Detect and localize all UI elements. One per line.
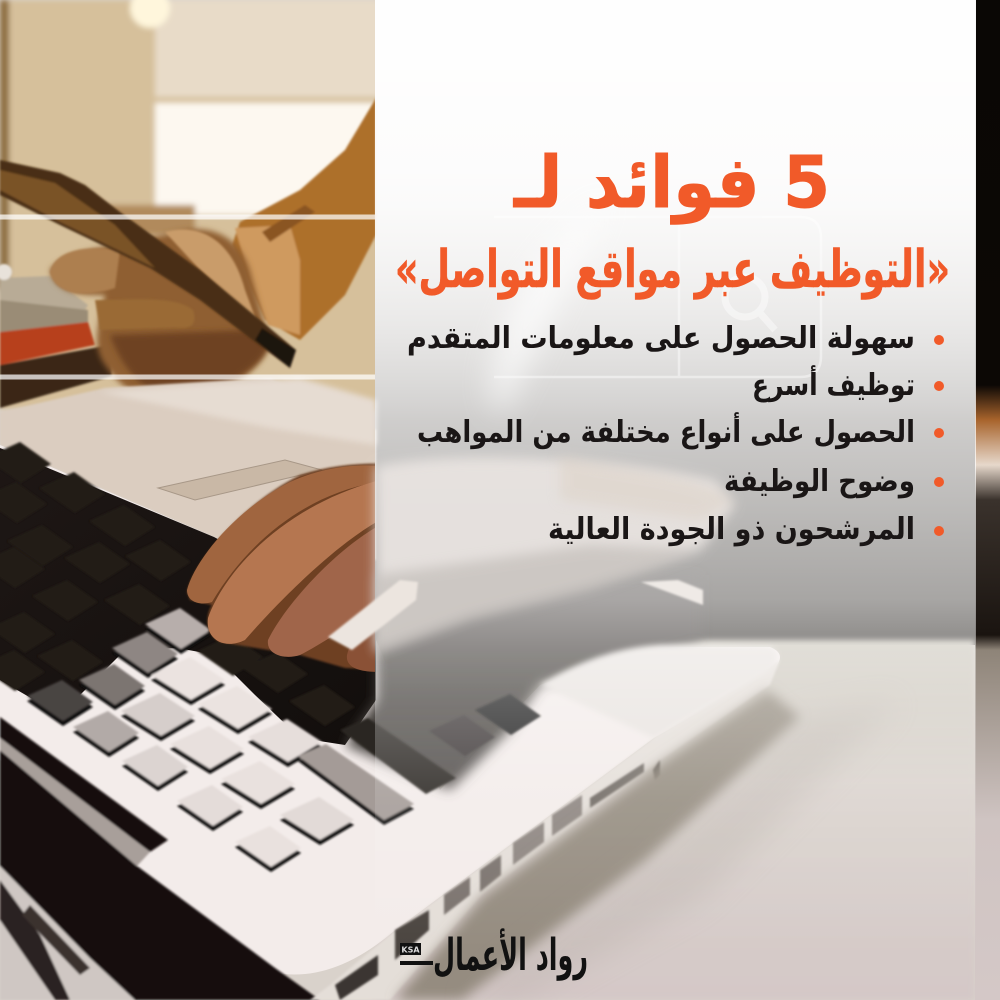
phone: [0, 160, 296, 368]
soft laptop shadow on desk: [395, 690, 800, 1000]
item 3: الحصول على أنواع مختلفة من المواهب: [417, 412, 915, 450]
item 1: سهولة الحصول على معلومات المتقدم: [407, 321, 915, 356]
search box graphic: [494, 217, 821, 377]
dark keyboard well: [0, 448, 376, 745]
laptop ports: [335, 760, 660, 1000]
logo: [400, 928, 588, 981]
light keys: [27, 608, 414, 872]
well seen through panel: [345, 575, 700, 790]
title: [395, 141, 950, 300]
gray keys under panel: [340, 694, 541, 794]
trackpad: [540, 645, 777, 738]
dark keys: [0, 442, 355, 726]
orange sweater sleeve: [232, 98, 376, 340]
item 5: المرشحون ذو الجودة العالية: [548, 512, 915, 547]
benefits list: [407, 321, 944, 547]
shadow fade on desk: [462, 700, 900, 1000]
soft white shape behind search: [490, 195, 610, 420]
laptop palm and trackpad top: [0, 378, 376, 560]
desk surface: [375, 640, 975, 1000]
laptop base: [0, 445, 780, 975]
hand holding phone: [50, 229, 270, 407]
hand through the panel: [376, 455, 735, 655]
logo: رواد الأعمال: [433, 928, 588, 981]
translucent white panel: [375, 0, 976, 1000]
title line 1: 5 فوائد لـ: [513, 141, 830, 224]
horizontal light lines: [0, 217, 375, 377]
logo: KSA: [401, 946, 420, 954]
item 2: توظيف أسرع: [752, 365, 915, 403]
dark room behind laptop: [375, 0, 975, 645]
notebook at left: [0, 264, 112, 408]
blurred wall and window: [0, 0, 380, 410]
white key beside finger: [328, 580, 418, 650]
right edge strip: [975, 0, 1000, 1000]
item 4: وضوح الوظيفة: [724, 464, 915, 499]
white corner of trackpad behind hand: [641, 580, 703, 605]
laptop side face: [310, 660, 780, 1000]
hand on keyboard: [186, 462, 375, 672]
dark strip and hinge at lower left: [0, 717, 320, 1000]
